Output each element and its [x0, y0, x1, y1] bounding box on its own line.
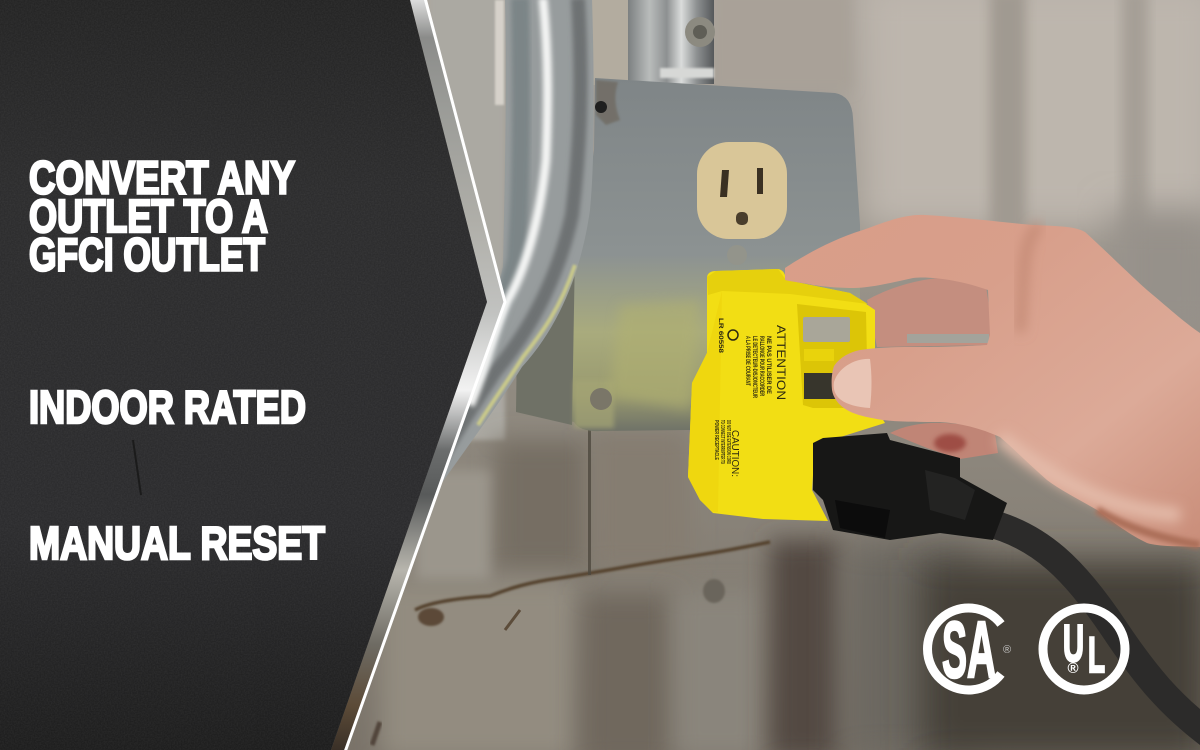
box screw [590, 388, 612, 410]
CSA certification logo: S [942, 605, 967, 694]
heading: convert any outlet to a GFCI outlet: OUTLET TO A [29, 190, 268, 242]
wall crack [415, 542, 770, 610]
feature: indoor rated: INDOOR RATED [29, 381, 306, 433]
chrome divider band [331, 0, 505, 750]
adapter label: caution details: POWER RECEPTACLE [713, 420, 719, 460]
photo: metal junction box [516, 78, 860, 431]
adapter label: french warning: A LA PRISE DE COURANT [744, 336, 750, 386]
dark left panel [0, 0, 500, 750]
white chevron line [345, 0, 505, 750]
UL certification logo: ® [1067, 660, 1079, 677]
UL certification logo: L [1088, 627, 1105, 683]
wall mounting screw [703, 579, 725, 603]
CSA certification logo: ® [1003, 644, 1011, 656]
photo: hand [785, 215, 1200, 547]
box screw hole [595, 101, 607, 113]
heading: convert any outlet to a GFCI outlet: CONVERT ANY [29, 152, 295, 204]
photo: cream wall outlet [697, 142, 787, 239]
CSA certification logo: A [967, 605, 996, 694]
adapter label: tiny CSA mark [728, 330, 738, 340]
heading: convert any outlet to a GFCI outlet: GFCI OUTLET [29, 228, 265, 280]
photo: curved metal conduit [420, 0, 594, 497]
test button [804, 373, 838, 399]
adapter label: caution: CAUTION: [729, 430, 740, 477]
outlet screw [727, 245, 747, 265]
feature: manual reset: MANUAL RESET [29, 517, 325, 569]
reset button [803, 317, 850, 342]
adapter label: french warning: NE PAS UTILISER DE [765, 336, 771, 394]
adapter label: caution details [713, 420, 731, 464]
adapter label: french warning: LE DETECTEUR-DISJONCTEUR [751, 336, 757, 398]
UL certification logo [1043, 608, 1125, 690]
adapter label: french warning: RALLONGE POUR RACCORDER [758, 336, 764, 396]
photo: black power cord [985, 522, 1200, 735]
photo: black plug [813, 433, 1007, 540]
CSA certification logo [928, 605, 1011, 694]
adapter label: attention: ATTENTION [774, 325, 788, 400]
photo: back fingers [867, 277, 998, 459]
photo: yellow GFCI adapter [688, 269, 885, 521]
adapter label: caution details: DO NOT USE EXTENSION CORD [725, 420, 731, 464]
heading: convert any outlet to a GFCI outlet [29, 152, 295, 280]
photo: vertical conduit stub above the box [628, 0, 715, 84]
adapter label: caution details: TO CONNECT INTERRUPTER TO [719, 420, 725, 464]
UL certification logo: U [1063, 615, 1084, 673]
adapter label: french warning [744, 336, 771, 398]
adapter label: file number: LR 60558 [717, 318, 723, 354]
thumb nail [834, 359, 872, 408]
